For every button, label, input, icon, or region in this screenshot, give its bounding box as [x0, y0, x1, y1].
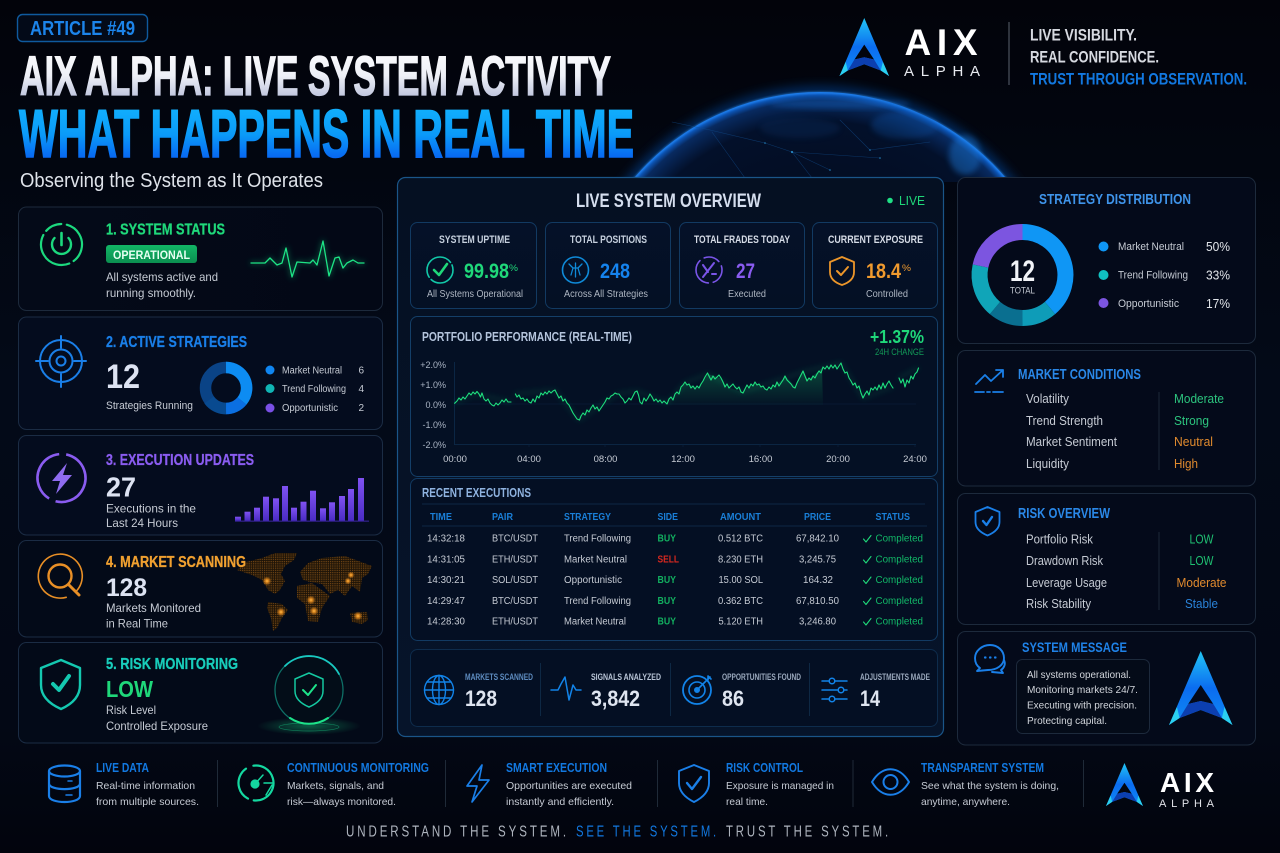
table row 5: 5.120 ETH	[718, 616, 763, 628]
table row 2: 14:31:05	[427, 554, 465, 566]
feature: transparent system: anytime, anywhere.	[921, 796, 1010, 808]
feature: live data	[49, 761, 199, 808]
metric: 27 executions: Last 24 Hours	[106, 516, 178, 530]
kpi: current exposure: CURRENT EXPOSURE	[828, 234, 923, 246]
condition labels	[1026, 392, 1117, 471]
table row 3: Opportunistic	[564, 575, 622, 586]
live indicator: LIVE	[899, 194, 925, 208]
panel: system status	[18, 207, 382, 310]
metric: 27 executions	[106, 472, 196, 530]
kpi: total trades today: Executed	[728, 289, 766, 300]
icon: check ring	[427, 257, 453, 283]
heading: 2. ACTIVE STRATEGIES	[106, 334, 247, 351]
feature: live data: Real-time information	[96, 780, 195, 792]
tagline: LIVE VISIBILITY.	[1030, 26, 1137, 44]
metric: 27 executions: Executions in the	[106, 502, 196, 516]
kpi: total positions	[546, 222, 670, 308]
condition labels: Market Sentiment	[1026, 435, 1117, 449]
table row 2: Market Neutral	[564, 554, 627, 566]
feature: risk control: Exposure is managed in	[726, 780, 834, 792]
line chart: 00:00	[443, 454, 467, 465]
slogan: UNDERSTAND THE SYSTEM.	[346, 824, 569, 840]
message box: Executing with precision.	[1027, 700, 1137, 712]
panel: strategy distribution	[958, 178, 1256, 344]
table row 1: Trend Following	[564, 534, 631, 544]
metric: 128 markets: Markets Monitored	[106, 601, 201, 615]
heading: MARKET CONDITIONS	[1018, 366, 1141, 383]
legend: 50%	[1206, 240, 1230, 254]
kpi: current exposure: %	[902, 263, 911, 273]
donut total: TOTAL	[1010, 286, 1035, 296]
shield hologram	[257, 656, 361, 735]
logo: AIX Alpha footer	[1106, 763, 1215, 810]
table row 1: 0.512 BTC	[718, 534, 763, 544]
risk labels: Risk Stability	[1026, 597, 1092, 611]
title: WHAT HAPPENS IN REAL TIME	[19, 96, 634, 172]
line chart: 0.0%	[425, 400, 446, 410]
heading: 3. EXECUTION UPDATES	[106, 452, 254, 469]
feature: risk control	[679, 761, 834, 808]
table row 5: Completed	[876, 616, 923, 628]
table row 3: Completed	[876, 575, 923, 586]
subtitle: Observing the System as It Operates	[20, 170, 323, 192]
risk values: Stable	[1185, 597, 1218, 611]
stat: markets scanned: 128	[465, 686, 497, 711]
kpi: current exposure: Controlled	[866, 289, 908, 300]
table row 4: 0.362 BTC	[718, 596, 763, 607]
stat: markets scanned: MARKETS SCANNED	[465, 672, 533, 682]
line chart: 16:00	[749, 454, 772, 465]
metric: 12 strategies: 12	[106, 358, 140, 396]
feature: live data: from multiple sources.	[96, 796, 199, 808]
change value: +1.37%	[870, 327, 924, 347]
table row 2	[427, 554, 923, 566]
feature: smart execution: Opportunities are executed	[506, 780, 632, 792]
legend: Opportunistic	[282, 403, 338, 414]
metric: 27 executions: 27	[106, 472, 136, 502]
condition values: High	[1174, 457, 1198, 471]
condition values: Neutral	[1174, 435, 1213, 449]
table row 1	[427, 534, 923, 544]
table row 2: 8.230 ETH	[718, 554, 763, 566]
metric: low risk: Controlled Exposure	[106, 719, 208, 733]
icon: shield	[976, 507, 1000, 536]
line chart: -2.0%	[422, 440, 446, 450]
icon: trend	[975, 370, 1003, 392]
legend: Market Neutral	[282, 366, 342, 376]
stat: opportunities found: OPPORTUNITIES FOUND	[722, 672, 801, 682]
risk labels: Leverage Usage	[1026, 576, 1107, 590]
line chart: 04:00	[517, 454, 541, 465]
panel: market scanning	[18, 540, 382, 637]
article badge: ARTICLE #49	[30, 18, 135, 40]
heading: SYSTEM MESSAGE	[1022, 639, 1127, 655]
legend: Market Neutral	[1118, 241, 1184, 253]
feature: transparent system	[872, 761, 1059, 808]
title: AIX ALPHA: LIVE SYSTEM ACTIVITY	[20, 44, 611, 107]
legend	[266, 366, 364, 414]
table header: SIDE	[658, 511, 678, 523]
globe backdrop	[620, 80, 1020, 182]
metric: 128 markets: in Real Time	[106, 616, 168, 630]
kpi: total trades today	[680, 222, 804, 308]
logo: AIX Alpha footer: ALPHA	[1159, 798, 1215, 810]
description	[106, 270, 218, 300]
table row 5: 14:28:30	[427, 616, 465, 628]
metric: 128 markets: 128	[106, 574, 147, 602]
line chart	[420, 360, 927, 465]
logo: AIX Alpha footer: AIX	[1160, 767, 1214, 798]
heading: STRATEGY DISTRIBUTION	[1039, 191, 1191, 208]
stat: signals analyzed	[551, 672, 661, 711]
risk values: LOW	[1190, 532, 1214, 546]
table row 1: Completed	[876, 534, 923, 544]
legend	[1098, 240, 1230, 311]
feature: smart execution: instantly and efficiently.	[506, 796, 614, 808]
message box: Protecting capital.	[1027, 715, 1107, 727]
logo mark	[1169, 651, 1232, 725]
donut total: 12	[1010, 255, 1035, 288]
line chart: -1.0%	[422, 420, 446, 430]
line chart: 12:00	[671, 454, 695, 465]
metric: low risk: Risk Level	[106, 703, 156, 717]
feature: smart execution: SMART EXECUTION	[506, 761, 607, 775]
chart heading: PORTFOLIO PERFORMANCE (REAL-TIME)	[422, 329, 632, 344]
table heading: RECENT EXECUTIONS	[422, 485, 531, 500]
kpi: system uptime: %	[509, 263, 518, 273]
feature: continuous monitoring	[232, 759, 429, 808]
live indicator	[887, 194, 925, 208]
table row 4	[427, 596, 923, 607]
legend: Trend Following	[1118, 270, 1188, 282]
feature: continuous monitoring: Markets, signals, and	[287, 780, 384, 792]
stat: adjustments made: ADJUSTMENTS MADE	[860, 672, 930, 682]
table row 5: Market Neutral	[564, 616, 626, 628]
icon: chat	[975, 645, 1005, 673]
tagline: REAL CONFIDENCE.	[1030, 48, 1159, 66]
stat: signals analyzed: SIGNALS ANALYZED	[591, 672, 661, 682]
world map	[237, 553, 372, 631]
legend: 17%	[1206, 297, 1230, 311]
condition values: Moderate	[1174, 392, 1224, 406]
heading: 4. MARKET SCANNING	[106, 554, 246, 571]
logo: AIX Alpha top: ALPHA	[904, 63, 980, 80]
kpi: system uptime	[410, 222, 536, 308]
table row 5: BUY	[658, 616, 676, 628]
panel: risk monitoring	[18, 642, 382, 743]
risk values: LOW	[1190, 554, 1214, 568]
table header: STRATEGY	[564, 511, 611, 523]
table row 3	[427, 575, 923, 586]
table row 2: Completed	[876, 554, 923, 566]
table row 4: BUY	[658, 596, 676, 607]
change value	[870, 327, 924, 357]
table row 5	[427, 616, 923, 628]
heading: 5. RISK MONITORING	[106, 656, 238, 673]
stat: opportunities found	[683, 672, 801, 711]
legend: 33%	[1206, 268, 1230, 282]
table row 3: BUY	[658, 575, 676, 586]
feature: smart execution	[467, 761, 632, 808]
metric: low risk	[106, 676, 208, 733]
line chart: 08:00	[594, 454, 617, 465]
feature: transparent system: TRANSPARENT SYSTEM	[921, 761, 1044, 775]
table header: PRICE	[804, 511, 831, 523]
logo: AIX Alpha top: AIX	[904, 22, 978, 63]
donut total	[1010, 255, 1035, 296]
stat: adjustments made	[822, 672, 930, 711]
heartbeat line	[251, 241, 364, 277]
stat: adjustments made: 14	[860, 686, 881, 711]
panel: recent executions	[410, 478, 938, 640]
tagline	[1008, 22, 1247, 88]
kpi: system uptime: 99.98	[464, 260, 509, 283]
heading: RISK OVERVIEW	[1018, 505, 1111, 522]
legend: 2	[358, 403, 364, 414]
kpi: total trades today: 27	[736, 260, 755, 283]
panel: execution updates	[18, 436, 382, 535]
line chart: 20:00	[826, 454, 850, 465]
risk labels: Drawdown Risk	[1026, 554, 1104, 568]
metric: 12 strategies	[106, 358, 193, 412]
icon: target	[36, 336, 86, 387]
line chart: +2.0%	[420, 360, 446, 370]
risk labels: Portfolio Risk	[1026, 532, 1094, 546]
donut chart	[980, 232, 1065, 318]
line chart: 24:00	[903, 454, 927, 465]
panel: system message	[958, 632, 1256, 745]
table row 1: BTC/USDT	[492, 534, 538, 544]
feature: transparent system: See what the system is doing,	[921, 780, 1059, 792]
table header: STATUS	[876, 511, 910, 523]
title	[19, 44, 634, 172]
kpi: current exposure: 18.4	[866, 260, 901, 283]
bar chart	[235, 478, 369, 522]
line chart: +1.0%	[420, 380, 446, 390]
feature: live data: LIVE DATA	[96, 761, 149, 775]
table row 3: 164.32	[803, 575, 833, 586]
kpi: system uptime: All Systems Operational	[427, 289, 523, 300]
panel: active strategies	[18, 317, 382, 430]
table header	[430, 511, 910, 523]
table header: PAIR	[492, 511, 513, 523]
condition labels: Volatility	[1026, 392, 1070, 406]
slogan: SEE THE SYSTEM.	[576, 824, 719, 840]
slogan	[346, 824, 891, 840]
table row 2: ETH/USDT	[492, 554, 538, 566]
table row 2: 3,245.75	[799, 554, 836, 566]
table row 4: 67,810.50	[796, 596, 839, 607]
panel: activity stats	[410, 650, 938, 726]
kpi: system uptime: SYSTEM UPTIME	[439, 234, 510, 246]
table header: TIME	[430, 511, 452, 523]
stat: markets scanned	[424, 672, 533, 711]
panel: risk overview	[958, 494, 1256, 624]
kpi: total trades today: TOTAL FRADES TODAY	[694, 234, 791, 246]
feature: continuous monitoring: CONTINUOUS MONITORING	[287, 761, 429, 775]
stat: opportunities found: 86	[722, 686, 744, 711]
legend: 4	[358, 384, 364, 395]
table row 1: 67,842.10	[796, 534, 839, 544]
metric: low risk: LOW	[106, 676, 153, 702]
description: All systems active and	[106, 270, 218, 284]
icon: bolt ring	[31, 447, 92, 509]
condition labels: Liquidity	[1026, 457, 1070, 471]
panel: portfolio performance	[410, 316, 938, 476]
message box: Monitoring markets 24/7.	[1027, 684, 1138, 696]
kpi: total positions: TOTAL POSITIONS	[570, 234, 647, 246]
status badge: OPERATIONAL	[113, 248, 190, 262]
icon: shield orange	[830, 257, 854, 285]
table row 4: Trend Following	[564, 596, 631, 607]
table row 4: 14:29:47	[427, 596, 465, 607]
condition values: Strong	[1174, 414, 1209, 428]
condition values	[1174, 392, 1224, 471]
icon: magnifier	[38, 554, 82, 598]
kpi: total positions: Across All Strategies	[564, 289, 648, 300]
slogan: TRUST THE SYSTEM.	[726, 824, 891, 840]
change value: 24H CHANGE	[875, 347, 924, 357]
logo: AIX Alpha top	[840, 18, 980, 80]
metric: 128 markets	[106, 574, 201, 630]
message box: All systems operational.	[1027, 669, 1131, 681]
table row 3: SOL/USDT	[492, 575, 538, 586]
stat: signals analyzed: 3,842	[591, 686, 640, 711]
kpi: total positions: 248	[600, 260, 630, 283]
table header: AMOUNT	[720, 511, 762, 523]
icon: network ring	[562, 257, 588, 283]
table row 1: BUY	[658, 534, 676, 544]
icon: power	[36, 219, 87, 270]
donut chart	[206, 367, 247, 409]
table row 1: 14:32:18	[427, 534, 465, 544]
icon: trade ring	[696, 257, 722, 283]
condition labels: Trend Strength	[1026, 414, 1103, 428]
feature: continuous monitoring: risk—always monitored.	[287, 796, 396, 808]
message box	[1016, 660, 1150, 734]
feature: risk control: real time.	[726, 796, 768, 808]
table row 2: SELL	[658, 554, 679, 566]
heading: 1. SYSTEM STATUS	[106, 222, 225, 238]
icon: shield	[41, 660, 80, 709]
legend: 6	[358, 366, 364, 376]
heading: LIVE SYSTEM OVERVIEW	[576, 191, 761, 212]
table row 5: 3,246.80	[799, 616, 836, 628]
table row 3: 15.00 SOL	[718, 575, 763, 586]
feature: risk control: RISK CONTROL	[726, 761, 803, 775]
legend: Trend Following	[282, 384, 346, 395]
risk labels	[1026, 532, 1107, 611]
panel: live system overview	[398, 178, 944, 736]
kpi: current exposure	[812, 222, 938, 308]
panel: market conditions	[958, 350, 1256, 486]
table row 4: Completed	[876, 596, 923, 607]
risk values: Moderate	[1176, 576, 1227, 590]
description: running smoothly.	[106, 286, 196, 300]
table row 3: 14:30:21	[427, 575, 465, 586]
table row 5: ETH/USDT	[492, 616, 538, 628]
risk values	[1176, 532, 1227, 611]
legend: Opportunistic	[1118, 298, 1179, 310]
metric: 12 strategies: Strategies Running	[106, 400, 193, 412]
table row 4: BTC/USDT	[492, 596, 538, 607]
